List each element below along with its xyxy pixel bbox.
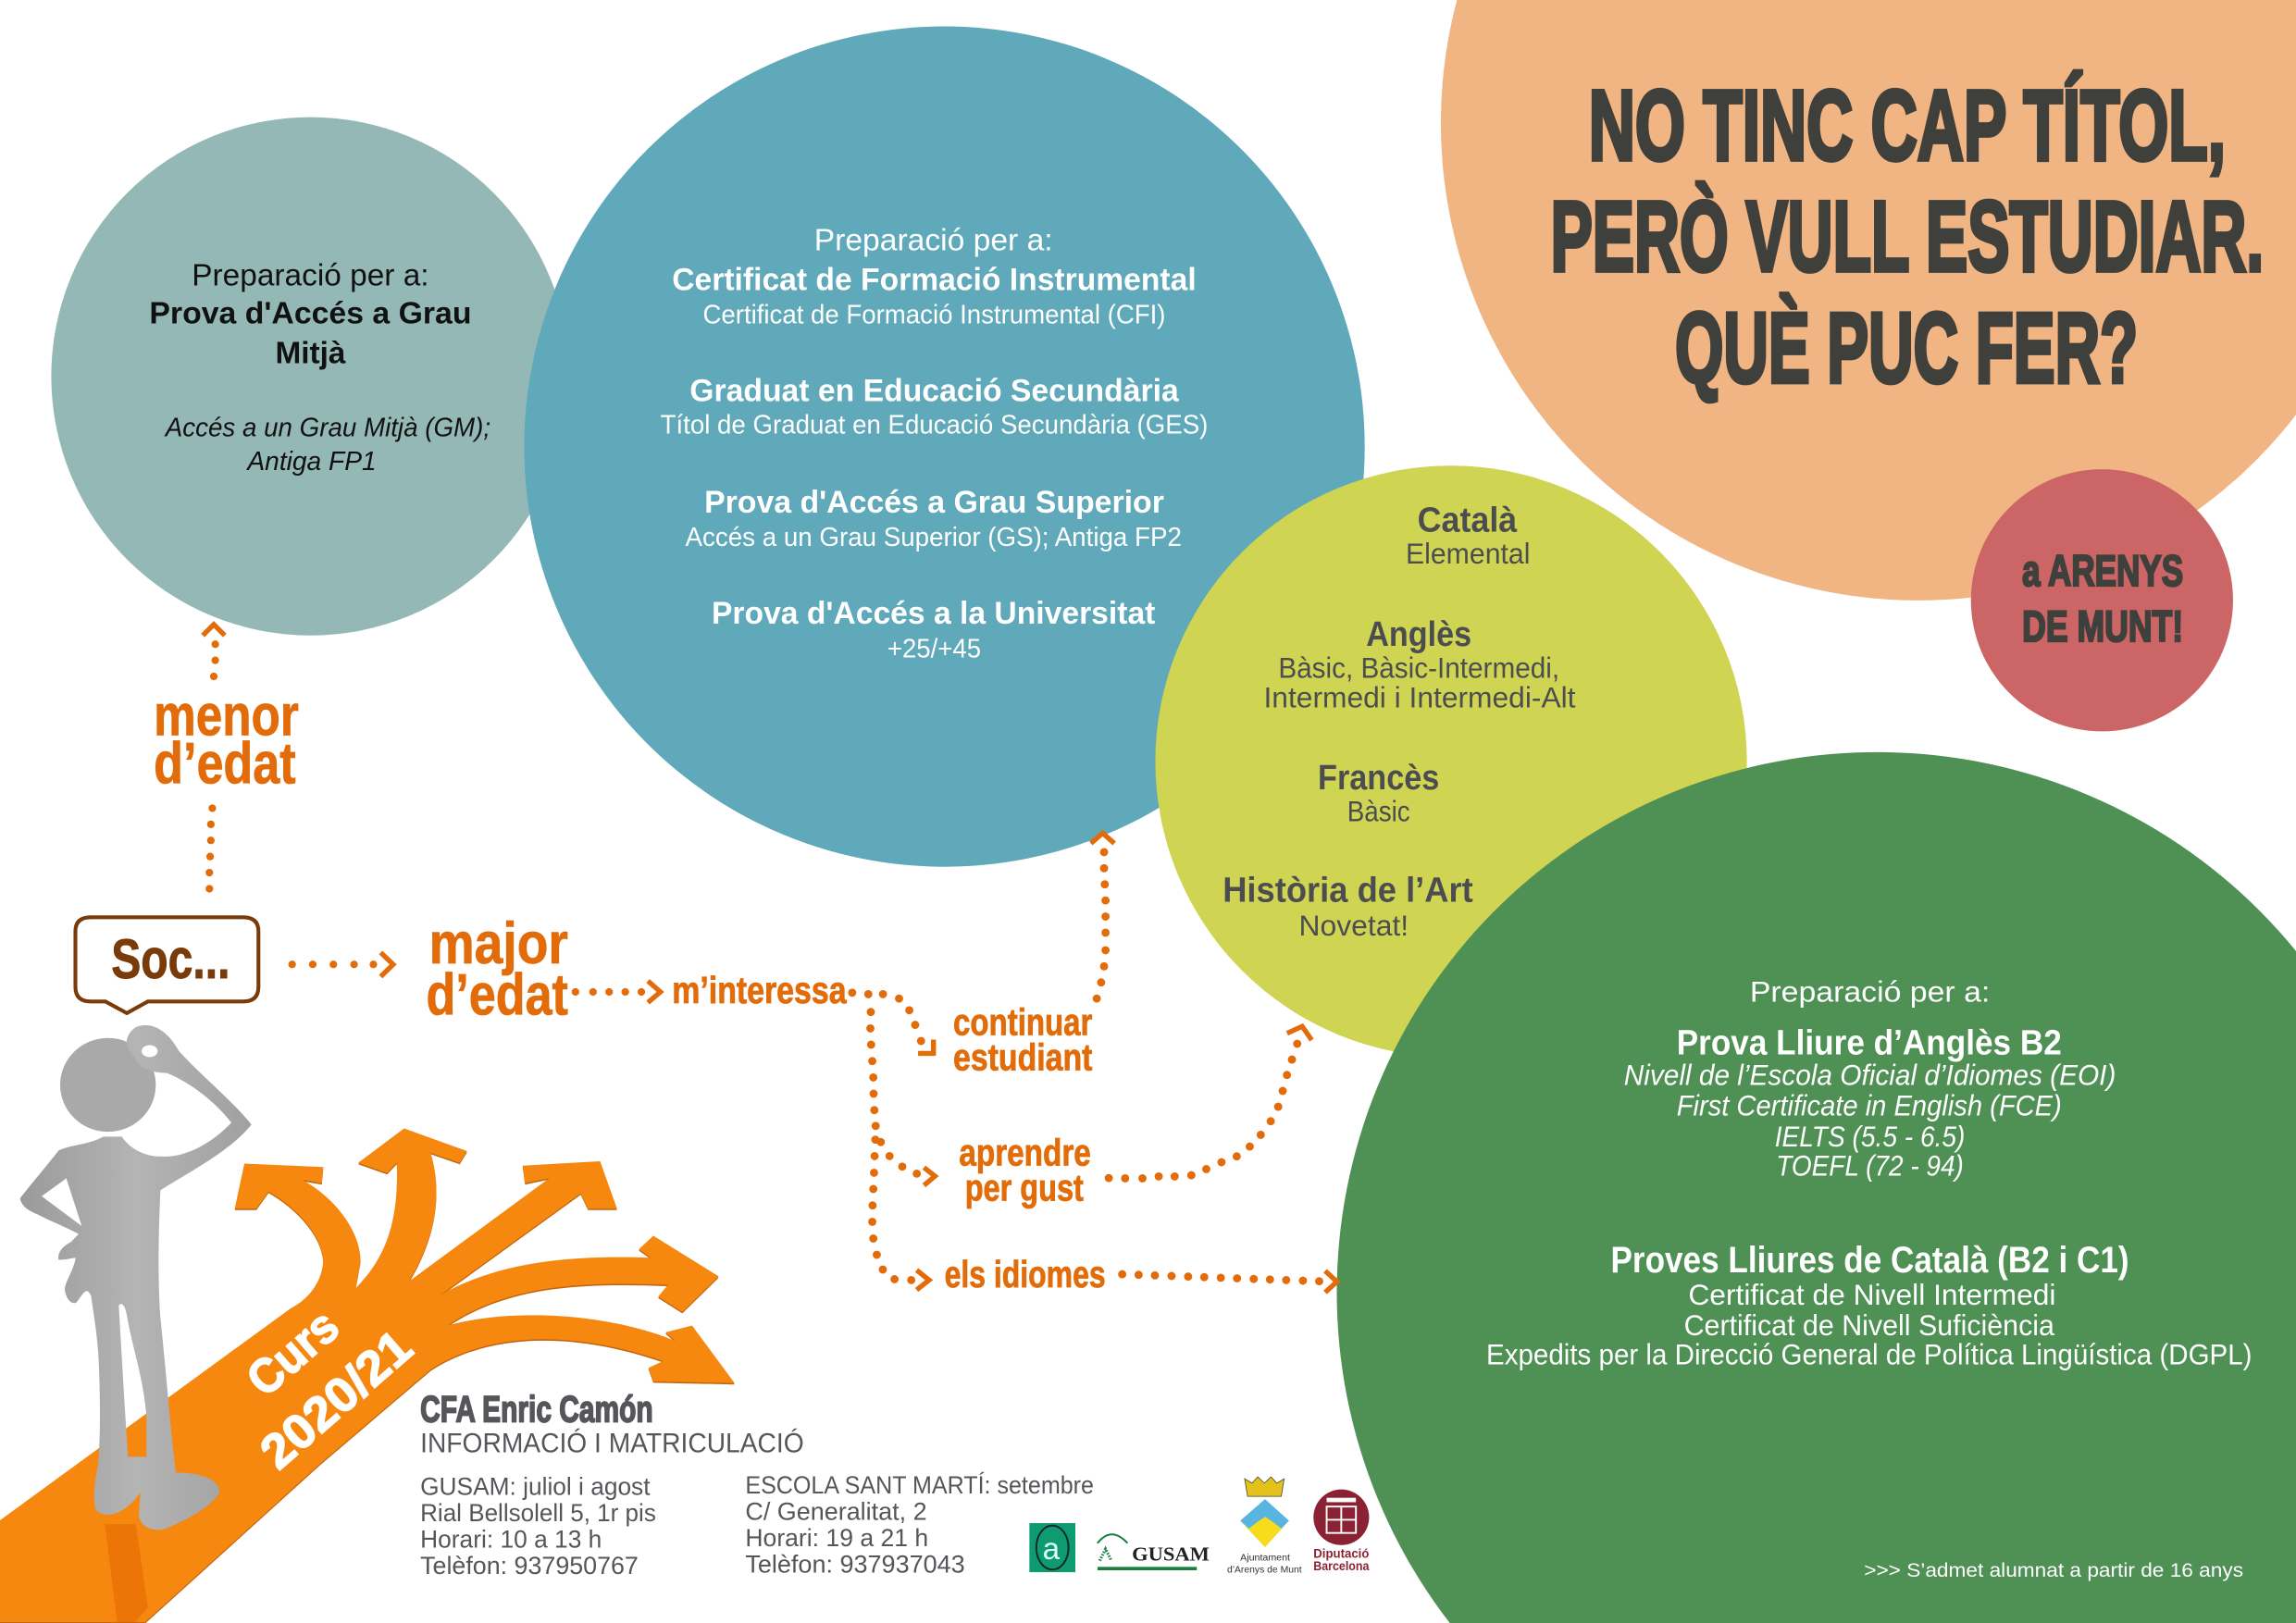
panel: title circle bbox=[1441, 0, 2296, 601]
panel: els idiomes bbox=[1337, 752, 2296, 1623]
arrow: aprendre per gust to yellow circle bbox=[1105, 1026, 1311, 1183]
label: aprendre per gust bbox=[959, 1132, 1091, 1208]
contact: Escola Sant Martí bbox=[745, 1471, 1094, 1578]
logo: Diputació Barcelona: Diputació bbox=[1313, 1547, 1369, 1561]
label: aprendre per gust: per gust bbox=[965, 1166, 1084, 1208]
text: course year: Curs bbox=[237, 1299, 350, 1407]
arrow: els idiomes to green circle bbox=[1118, 1270, 1337, 1293]
panel: els idiomes: TOEFL (72 - 94) bbox=[1776, 1149, 1964, 1183]
text: course year: 2020/21 bbox=[251, 1320, 423, 1480]
logo: Diputació Barcelona bbox=[1313, 1490, 1370, 1573]
panel: els idiomes: Certificat de Nivell Suficiència bbox=[1684, 1308, 2054, 1342]
panel: aprendre per gust: Bàsic bbox=[1347, 795, 1410, 828]
panel: aprendre per gust: Elemental bbox=[1406, 537, 1530, 570]
panel: aprendre per gust: Anglès bbox=[1366, 615, 1471, 654]
label: major d'edat: d’edat bbox=[426, 963, 568, 1028]
panel: aprendre per gust: Català bbox=[1418, 501, 1518, 539]
panel: aprendre per gust: Novetat! bbox=[1298, 909, 1409, 942]
title bbox=[1551, 69, 2264, 403]
panel: continuar estudiant: Accés a un Grau Superior (GS); Antiga FP2 bbox=[686, 523, 1182, 552]
panel: continuar estudiant: Preparació per a: bbox=[814, 224, 1053, 258]
contact: Escola Sant Martí: Horari: 19 a 21 h bbox=[745, 1524, 928, 1552]
panel: els idiomes: Preparació per a: bbox=[1750, 974, 1990, 1008]
logo: a bbox=[1029, 1523, 1075, 1572]
arrow: major d'edat to m'interessa bbox=[572, 981, 661, 1002]
contact: GUSAM: GUSAM: juliol i agost bbox=[420, 1473, 651, 1501]
panel: continuar estudiant: Títol de Graduat en Educació Secundària (GES) bbox=[661, 410, 1208, 440]
panel: aprendre per gust bbox=[1155, 465, 1747, 1057]
arrow: soc to menor d'edat bbox=[205, 804, 217, 893]
logo: Ajuntament d'Arenys de Munt: d’Arenys de Munt bbox=[1227, 1565, 1302, 1575]
contact: Escola Sant Martí: Telèfon: 937937043 bbox=[745, 1550, 965, 1578]
panel: continuar estudiant: Prova d'Accés a la Universitat bbox=[712, 596, 1155, 631]
panel: els idiomes: IELTS (5.5 - 6.5) bbox=[1775, 1120, 1965, 1153]
label: continuar estudiant: estudiant bbox=[953, 1036, 1093, 1079]
panel: els idiomes: First Certificate in English (FCE) bbox=[1677, 1089, 2062, 1122]
panel: prova d'accés a grau mitjà: Preparació per a: bbox=[192, 259, 429, 293]
panel: els idiomes: Proves Lliures de Català (B2 i C1) bbox=[1610, 1240, 2129, 1281]
label: menor d'edat: menor bbox=[154, 683, 299, 748]
label: menor d'edat: d’edat bbox=[154, 732, 296, 797]
peach circle bbox=[1441, 0, 2296, 601]
arrow: menor d'edat to grau mitjà bbox=[203, 625, 225, 680]
speech bubble: Soc... bbox=[75, 917, 258, 1013]
contact: GUSAM: Horari: 10 a 13 h bbox=[420, 1525, 602, 1553]
label: continuar estudiant bbox=[953, 1001, 1093, 1079]
arrow: m'interessa to continuar estudiant bbox=[848, 988, 934, 1056]
arrow: soc to major d'edat bbox=[289, 952, 393, 976]
panel: prova d'accés a grau mitjà: Accés a un Grau Mitjà (GM); bbox=[164, 414, 490, 443]
panel: els idiomes: >>> S’admet alumnat a partir de 16 anys bbox=[1864, 1559, 2243, 1581]
panel: aprendre per gust: Bàsic, Bàsic-Intermedi, bbox=[1278, 651, 1559, 685]
panel: aprendre per gust: Història de l’Art bbox=[1222, 872, 1473, 911]
panel: prova d'accés a grau mitjà bbox=[51, 118, 570, 636]
contact: GUSAM: Telèfon: 937950767 bbox=[420, 1552, 639, 1580]
logo: GUSAM bbox=[1098, 1534, 1210, 1570]
panel: prova d'accés a grau mitjà: Prova d'Accés a Grau bbox=[149, 297, 471, 331]
logo: Diputació Barcelona: Barcelona bbox=[1313, 1559, 1370, 1573]
panel: aprendre per gust: Intermedi i Intermedi-Alt bbox=[1263, 680, 1576, 713]
arrow: continuar estudiant to blue circle bbox=[1091, 833, 1114, 1003]
logo: Ajuntament d'Arenys de Munt bbox=[1227, 1477, 1302, 1575]
subheading: informació i matriculació: INFORMACIÓ I MATRICULACIÓ bbox=[420, 1429, 804, 1459]
panel: aprendre per gust: Francès bbox=[1318, 759, 1439, 798]
contact: Escola Sant Martí: ESCOLA SANT MARTÍ: setembre bbox=[745, 1471, 1094, 1499]
panel: els idiomes: Expedits per la Direcció General de Política Lingüística (DGPL) bbox=[1486, 1338, 2253, 1371]
speech bubble: Soc...: Soc... bbox=[111, 928, 230, 990]
panel: Arenys de Munt badge: DE MUNT! bbox=[2022, 602, 2183, 651]
contact: GUSAM: Rial Bellsolell 5, 1r pis bbox=[420, 1499, 656, 1527]
label: m'interessa: m’interessa bbox=[672, 969, 847, 1011]
panel: els idiomes: Certificat de Nivell Intermedi bbox=[1688, 1278, 2056, 1311]
label: els idiomes: els idiomes bbox=[945, 1253, 1106, 1295]
label: aprendre per gust: aprendre bbox=[959, 1132, 1091, 1174]
contact: GUSAM bbox=[420, 1473, 656, 1580]
logo: a: a bbox=[1043, 1532, 1061, 1567]
panel: continuar estudiant: Certificat de Formació Instrumental (CFI) bbox=[702, 301, 1165, 330]
panel: prova d'accés a grau mitjà: Mitjà bbox=[275, 336, 346, 370]
panel: continuar estudiant bbox=[524, 27, 1365, 867]
logo: GUSAM: GUSAM bbox=[1132, 1543, 1210, 1566]
icon: orange road with branching arrows bbox=[0, 1128, 735, 1622]
label: major d'edat bbox=[426, 911, 568, 1028]
road: shadow under feet bbox=[105, 1524, 148, 1622]
panel: continuar estudiant: +25/+45 bbox=[887, 634, 981, 663]
panel: Arenys de Munt badge: a ARENYS bbox=[2022, 547, 2183, 596]
panel: els idiomes: Prova Lliure d’Anglès B2 bbox=[1677, 1023, 2062, 1062]
label: continuar estudiant: continuar bbox=[953, 1001, 1092, 1044]
arrow: m'interessa to els idiomes bbox=[866, 1008, 929, 1290]
panel: continuar estudiant: Certificat de Formació Instrumental bbox=[672, 262, 1197, 297]
label: major d'edat: major bbox=[429, 911, 568, 976]
panel: prova d'accés a grau mitjà: Antiga FP1 bbox=[245, 447, 377, 477]
contact: Escola Sant Martí: C/ Generalitat, 2 bbox=[745, 1497, 927, 1525]
panel: continuar estudiant: Graduat en Educació Secundària bbox=[689, 374, 1180, 409]
arrow: m'interessa to aprendre per gust bbox=[876, 1138, 935, 1185]
label: menor d'edat bbox=[154, 683, 299, 797]
panel: Arenys de Munt badge bbox=[1971, 469, 2233, 731]
logo: Ajuntament d'Arenys de Munt: Ajuntament bbox=[1240, 1554, 1290, 1564]
panel: continuar estudiant: Prova d'Accés a Grau Superior bbox=[704, 485, 1164, 520]
icon: thinking person bbox=[20, 1025, 252, 1530]
panel: els idiomes: Nivell de l’Escola Oficial d’Idiomes (EOI) bbox=[1624, 1058, 2116, 1091]
heading: CFA Enric Camón: CFA Enric Camón bbox=[420, 1389, 653, 1430]
